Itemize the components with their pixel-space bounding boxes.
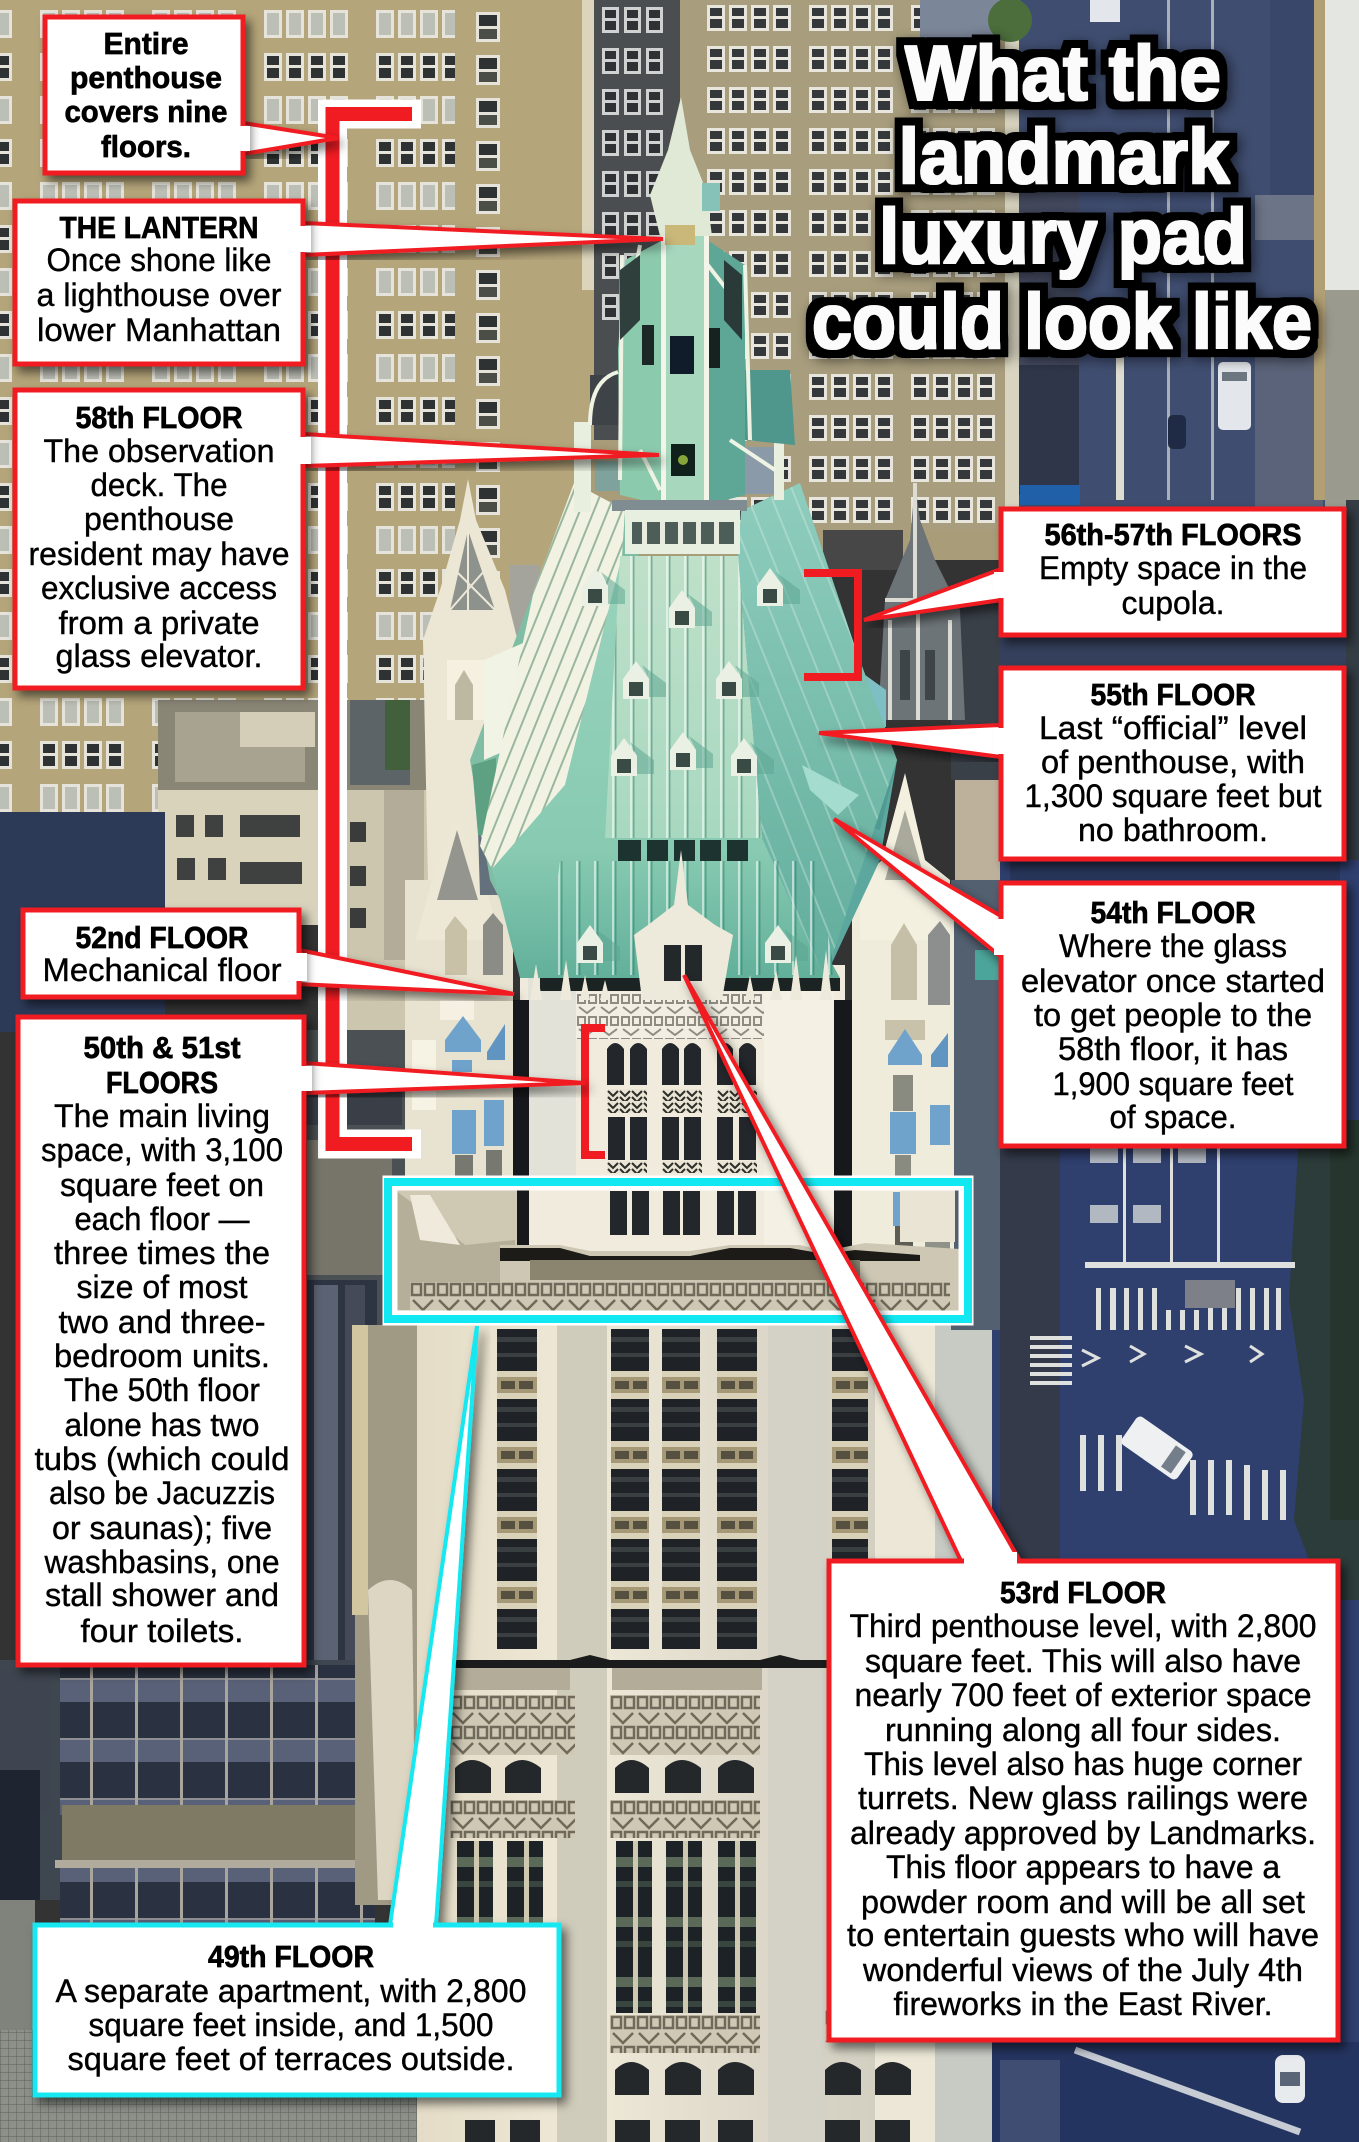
callout text: Third penthouse level, with 2,800 xyxy=(850,1608,1316,1644)
callout text: lower Manhattan xyxy=(37,312,281,348)
callout text: square feet of terraces outside. xyxy=(68,2041,514,2077)
callout text: floors. xyxy=(101,129,191,164)
arched windows xyxy=(455,1760,911,2142)
callout text: alone has two xyxy=(64,1407,260,1443)
callout text: stall shower and xyxy=(45,1577,279,1613)
callout text: Once shone like xyxy=(46,242,272,278)
callout text: size of most xyxy=(76,1269,248,1305)
right lower turret xyxy=(852,773,1000,1330)
callout text: This level also has huge corner xyxy=(864,1746,1302,1782)
callout: 49th floor xyxy=(35,1326,559,2095)
callout text: three times the xyxy=(54,1235,270,1271)
green copper cupola roof xyxy=(470,483,897,991)
callout text: 49th FLOOR xyxy=(208,1939,374,1974)
callout text: 55th FLOOR xyxy=(1090,677,1256,712)
callout text xyxy=(1021,895,1325,1135)
callout text: Where the glass xyxy=(1059,928,1287,964)
tower lower-left ledge xyxy=(352,1325,420,1905)
callout text: square feet on xyxy=(60,1167,264,1203)
left upper turret xyxy=(423,479,520,880)
callout text: a lighthouse over xyxy=(36,277,282,313)
callout text: resident may have xyxy=(28,536,290,572)
callout text: 58th FLOOR xyxy=(76,400,242,435)
railing platform xyxy=(612,500,747,511)
callout text xyxy=(28,400,290,674)
callout text: square feet. This will also have xyxy=(865,1643,1301,1679)
callout text: 50th & 51st xyxy=(84,1030,240,1065)
glass curtain-wall building at lower left xyxy=(0,1660,420,2142)
callout: 58th floor xyxy=(15,390,659,688)
callout text: The main living xyxy=(54,1098,270,1134)
callout text xyxy=(56,1939,526,2077)
band of pavement between right callouts xyxy=(1000,630,1346,670)
tracery crown xyxy=(576,992,764,1039)
side windows xyxy=(642,325,654,365)
callout text: covers nine xyxy=(64,94,228,129)
avenue seen from above xyxy=(920,0,1325,510)
chevron spandrels xyxy=(607,1089,757,1173)
callout text: 52nd FLOOR xyxy=(76,920,248,955)
callout text: Empty space in the xyxy=(1039,550,1307,586)
lantern wings xyxy=(618,240,663,505)
roof dormers xyxy=(577,568,808,963)
upper shaft of tower xyxy=(513,965,852,1325)
red bracket: 56th-57th floors xyxy=(804,573,858,677)
callout text: 1,900 square feet xyxy=(1052,1066,1294,1102)
callout text: tubs (which could xyxy=(34,1441,290,1477)
callout text: penthouse xyxy=(84,501,234,537)
dark roof slots xyxy=(618,840,748,861)
callout text xyxy=(34,1030,290,1649)
left tan apartment building xyxy=(0,0,600,830)
callout text: Last “official” level xyxy=(1039,710,1307,746)
callout: 54th floor xyxy=(834,819,1344,1146)
callout text xyxy=(1039,517,1307,621)
callout text: penthouse xyxy=(70,60,222,95)
cream spire tip xyxy=(650,97,712,236)
red bracket: entire penthouse span xyxy=(332,114,421,1144)
dark neighbouring block beside the tower xyxy=(307,1030,422,1670)
callout text: of penthouse, with xyxy=(1041,744,1305,780)
red bracket: 50th-51st floors xyxy=(585,1028,605,1155)
callout text: powder room and will be all set xyxy=(861,1884,1305,1920)
white roof and grey building on right edge xyxy=(1314,0,1359,1200)
central gable xyxy=(530,850,832,1000)
cyan-frame cornice area xyxy=(392,1185,960,1315)
callout text: also be Jacuzzis xyxy=(49,1475,275,1511)
callout text: space, with 3,100 xyxy=(41,1132,283,1168)
street intersection xyxy=(985,860,1359,2142)
upper windows xyxy=(607,1043,756,1235)
title: What the xyxy=(905,29,1221,117)
buttresses xyxy=(590,245,775,490)
callout text: two and three- xyxy=(58,1304,266,1340)
blue roof on the left xyxy=(0,812,165,1032)
base parapet shadow xyxy=(540,978,840,991)
callout text: exclusive access xyxy=(41,570,277,606)
callout text: four toilets. xyxy=(80,1613,243,1649)
callout text: to get people to the xyxy=(1034,997,1312,1033)
cornice xyxy=(440,1655,880,1668)
lantern and spire xyxy=(574,97,795,554)
lantern windows xyxy=(670,336,694,374)
right upper turret xyxy=(878,483,1000,880)
outer right slope xyxy=(741,483,897,978)
callout text: running along all four sides. xyxy=(885,1712,1281,1748)
cream townhouse and terrace xyxy=(158,565,540,1030)
callout text: 58th floor, it has xyxy=(1058,1031,1288,1067)
callout text: 54th FLOOR xyxy=(1090,895,1256,930)
callout text: glass elevator. xyxy=(56,638,262,674)
callout text: wonderful views of the July 4th xyxy=(862,1952,1303,1988)
title xyxy=(812,29,1312,365)
callout text xyxy=(1024,677,1322,848)
callout: 55th floor xyxy=(819,668,1344,859)
callout text: THE LANTERN xyxy=(60,210,258,245)
cream left band xyxy=(480,483,625,869)
callout text: fireworks in the East River. xyxy=(894,1986,1272,2022)
window bays xyxy=(497,1329,868,1649)
callout text: 1,300 square feet but xyxy=(1024,778,1322,814)
callout: the lantern xyxy=(15,201,663,364)
callout text: bedroom units. xyxy=(54,1338,270,1374)
lantern shaft xyxy=(663,222,707,504)
callout text: cupola. xyxy=(1122,585,1224,621)
callout: 52nd floor xyxy=(23,910,514,997)
title: landmark xyxy=(898,112,1230,200)
callout text: of space. xyxy=(1110,1099,1236,1135)
callout text xyxy=(64,26,228,164)
callout text: Mechanical floor xyxy=(42,952,282,988)
callout text: turrets. New glass railings were xyxy=(858,1780,1308,1816)
callout text: elevator once started xyxy=(1021,963,1325,999)
callout text: FLOORS xyxy=(106,1065,218,1100)
callout text: The 50th floor xyxy=(64,1372,260,1408)
callout text xyxy=(42,920,282,988)
title: luxury pad xyxy=(879,192,1247,280)
tall windows xyxy=(457,1841,756,2013)
Woolworth tower lower shaft xyxy=(417,1320,992,2142)
callout text: to entertain guests who will have xyxy=(847,1917,1319,1953)
callout: 50th and 51st floors xyxy=(18,1017,585,1665)
callout text: each floor — xyxy=(74,1201,250,1237)
callout text: A separate apartment, with 2,800 xyxy=(56,1973,526,2009)
cyan highlight frame for 49th floor xyxy=(388,1182,968,1319)
outer frame and glass xyxy=(574,422,591,512)
callout text: or saunas); five xyxy=(52,1510,272,1546)
callout: 56th-57th floors xyxy=(864,509,1344,635)
callout text: 56th-57th FLOORS xyxy=(1044,517,1302,552)
callout: entire penthouse xyxy=(45,17,338,173)
callout text: from a private xyxy=(58,605,260,641)
callout text: washbasins, one xyxy=(44,1544,280,1580)
callout text xyxy=(36,210,282,348)
title: could look like xyxy=(812,277,1312,365)
callout text: The observation xyxy=(44,433,274,469)
callout text: deck. The xyxy=(90,467,228,503)
callout text: nearly 700 feet of exterior space xyxy=(854,1677,1312,1713)
side of front xyxy=(492,556,840,978)
dark slate building xyxy=(582,0,686,450)
left lower turret xyxy=(405,819,513,1181)
callout text: 53rd FLOOR xyxy=(1000,1575,1166,1610)
right tan apartment building xyxy=(590,0,1019,570)
callout text: Entire xyxy=(104,26,188,61)
callout text: no bathroom. xyxy=(1078,812,1268,848)
callout: 53rd floor xyxy=(684,975,1338,2040)
callout text xyxy=(847,1575,1319,2022)
callout text: already approved by Landmarks. xyxy=(850,1815,1316,1851)
outer left slope xyxy=(470,483,640,978)
light front panel xyxy=(605,556,762,838)
tracery bands xyxy=(450,1668,910,2053)
callout text: This floor appears to have a xyxy=(886,1849,1280,1885)
callout text: square feet inside, and 1,500 xyxy=(88,2007,494,2043)
